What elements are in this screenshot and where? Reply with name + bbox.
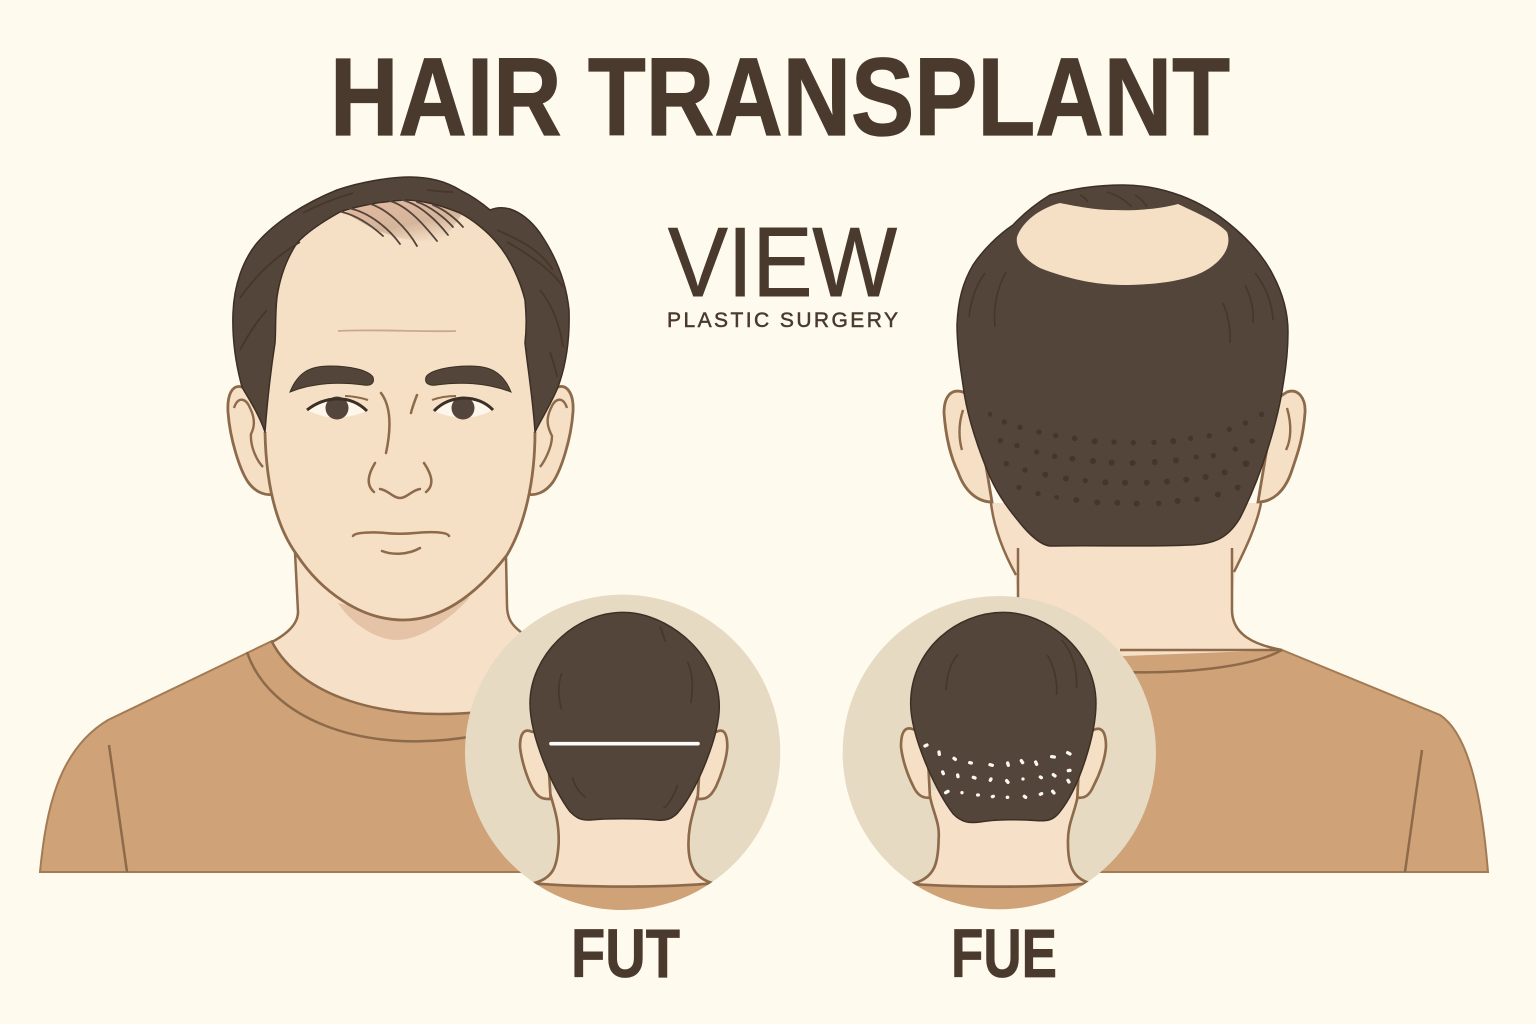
FUT neck: [535, 790, 713, 886]
FUT left ear: [520, 731, 551, 799]
thinning crown patch: [345, 202, 463, 241]
left ear: [228, 387, 274, 495]
right ear: [527, 387, 573, 495]
bald crown: [1017, 203, 1228, 285]
FUE label: FUE: [951, 915, 1057, 992]
FUT strip scar: [549, 742, 700, 746]
back neck: [991, 503, 1282, 660]
back view figure: [944, 185, 1488, 872]
FUE right ear: [1077, 729, 1106, 798]
back shirt: [1100, 650, 1488, 872]
back left ear: [944, 391, 992, 502]
front view figure: [40, 177, 573, 872]
chin shadow: [338, 597, 470, 640]
right eye: [432, 396, 493, 420]
FUT hair strands: [559, 627, 692, 808]
FUT shirt: [534, 882, 712, 910]
FUT label: FUT: [571, 915, 680, 992]
mouth: [353, 532, 449, 554]
logo: View Plastic Surgery: PLASTIC SURGERY: [667, 309, 898, 332]
front neck outlines: [272, 552, 522, 714]
face: [265, 185, 535, 620]
right eyebrow: [426, 366, 511, 392]
hair strands and shading: [240, 190, 563, 377]
FUE hair: [911, 612, 1096, 823]
logo: View Plastic Surgery: VIEW: [668, 207, 897, 317]
back right ear: [1258, 391, 1305, 502]
FUE extraction sites: [925, 745, 1070, 797]
back hair: [957, 185, 1288, 546]
front neck: [272, 540, 530, 714]
back hair strands: [969, 192, 1273, 343]
FUT inset circle: [465, 595, 780, 923]
nose: [369, 393, 431, 498]
title: HAIR TRANSPLANT: [330, 36, 1230, 159]
FUT hair: [530, 612, 719, 820]
FUE left ear: [901, 728, 930, 798]
jaw outline: [265, 432, 535, 620]
follicle dots on donor area: [988, 412, 1264, 507]
left eyebrow: [290, 366, 373, 392]
back neck outlines: [991, 503, 1282, 650]
front shirt: [40, 640, 530, 872]
FUE hair strands: [946, 640, 1077, 695]
forehead line: [338, 329, 456, 332]
FUE inset circle: [843, 596, 1156, 923]
front hair: [233, 177, 569, 432]
thin hair strands: [342, 200, 463, 246]
FUE shirt: [912, 883, 1086, 910]
FUE neck: [912, 790, 1090, 887]
left eye: [307, 396, 368, 420]
FUT right ear: [698, 731, 727, 799]
